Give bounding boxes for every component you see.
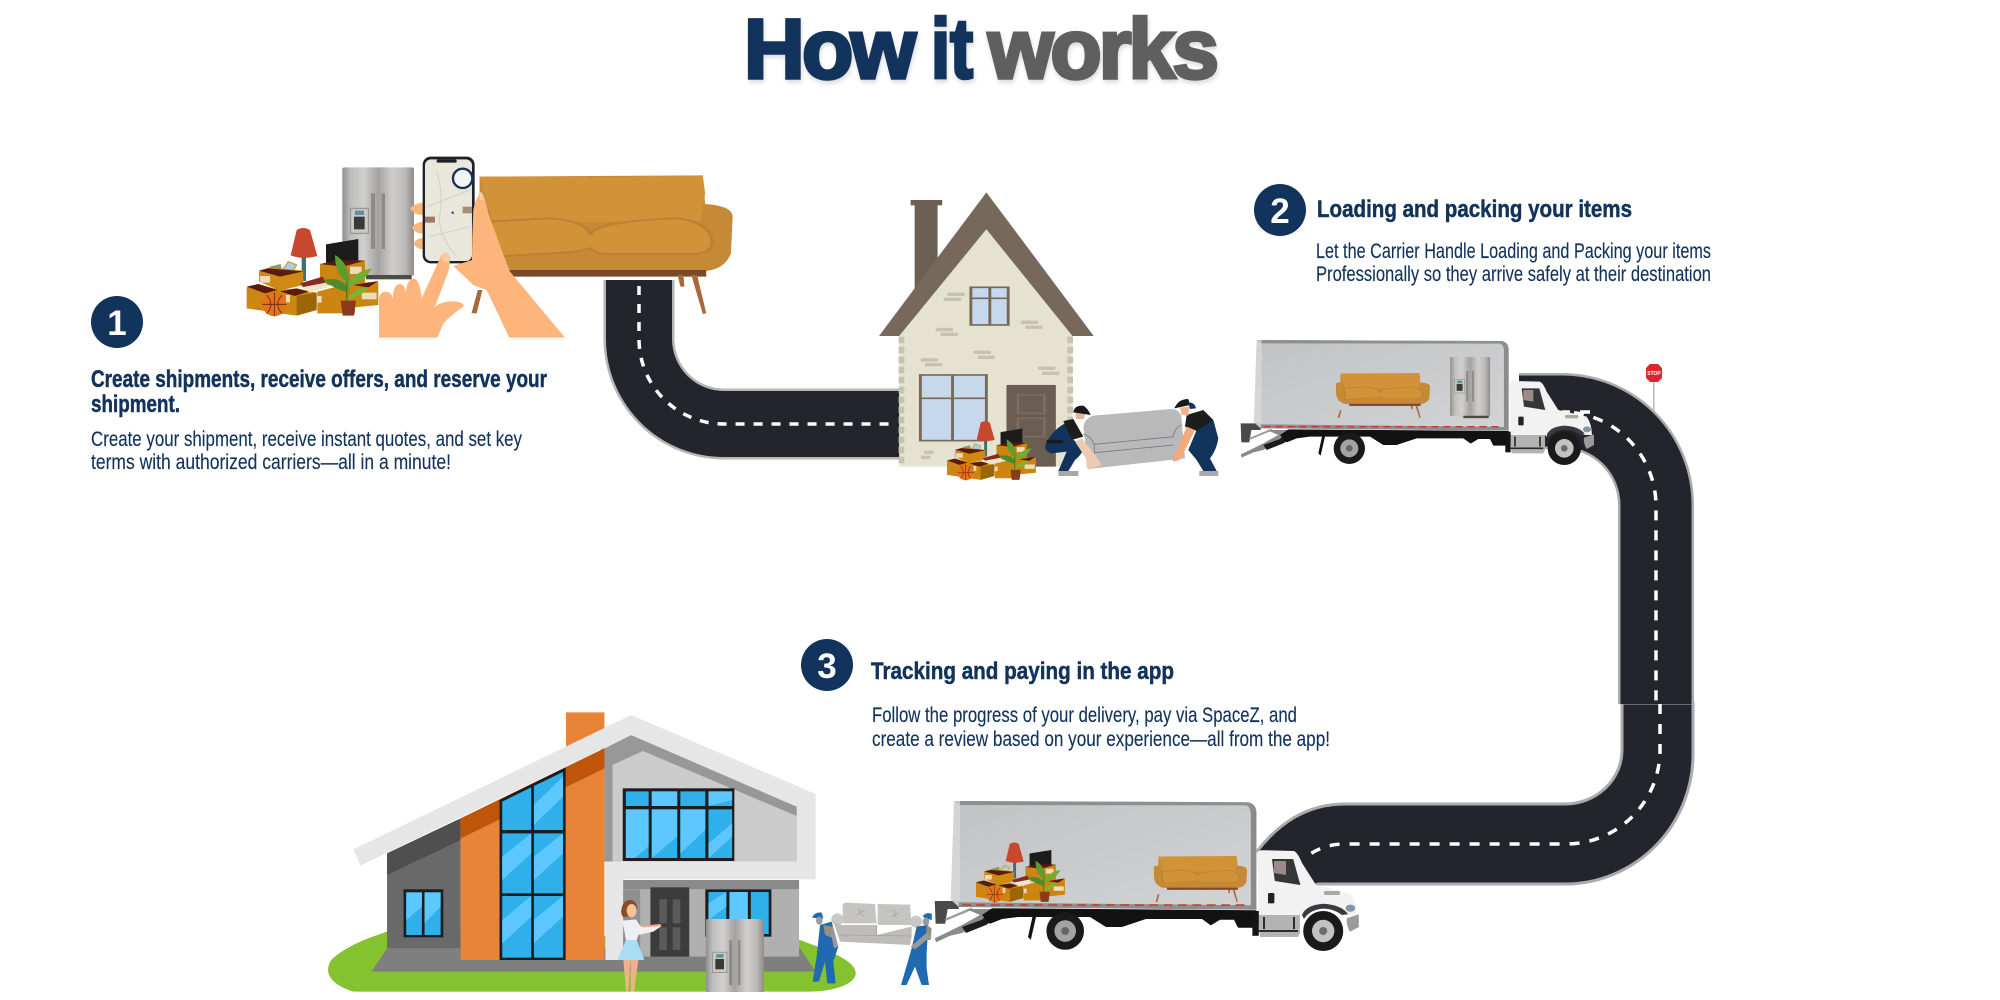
step 2 description: Let the Carrier Handle Loading and Packing your items bbox=[1316, 239, 1711, 263]
step 3 number badge bbox=[801, 639, 853, 691]
boxes in front of beige house bbox=[947, 421, 1036, 480]
fridge in front of house bbox=[706, 919, 764, 1000]
road 1: from sofa to house bbox=[639, 280, 900, 424]
step 1 description bbox=[91, 427, 522, 474]
step 3 description bbox=[872, 703, 1330, 751]
step 1 heading bbox=[91, 366, 547, 418]
step 1 heading: shipment. bbox=[91, 391, 180, 418]
step 2 number badge bbox=[1254, 184, 1306, 236]
movers carrying grey sofa bbox=[1045, 399, 1218, 476]
step 1 heading: Create shipments, receive offers, and reserve your bbox=[91, 366, 547, 393]
boxes on truck bbox=[976, 842, 1065, 902]
step 1 number badge: 1 bbox=[107, 304, 127, 343]
step 3 number badge: 3 bbox=[817, 647, 837, 686]
icon: hands holding phone bbox=[379, 157, 565, 338]
woman and movers in front of house bbox=[617, 900, 932, 992]
left mover bbox=[1045, 406, 1102, 476]
illustration: modern destination house bbox=[328, 712, 856, 992]
step 2 heading: Loading and packing your items bbox=[1317, 196, 1632, 223]
step 3 heading: Tracking and paying in the app bbox=[871, 658, 1174, 685]
truck 2 with boxes and sofa bbox=[935, 801, 1359, 951]
step 1 description: terms with authorized carriers—all in a minute! bbox=[91, 450, 451, 474]
tall window bbox=[500, 767, 566, 960]
step 3 description: create a review based on your experience—all from the app! bbox=[872, 727, 1330, 751]
title bbox=[744, 2, 1219, 96]
illustration: beige pickup house bbox=[879, 192, 1094, 467]
step 2 number badge: 2 bbox=[1270, 192, 1290, 231]
step 1 description: Create your shipment, receive instant quotes, and set key bbox=[91, 427, 522, 451]
step 2 description bbox=[1316, 239, 1711, 286]
icon: moving boxes bbox=[247, 228, 378, 316]
right mover bbox=[1173, 399, 1218, 476]
step 1 number badge bbox=[91, 296, 143, 348]
icon: stop sign bbox=[1646, 364, 1662, 410]
illustration: fridge, boxes and phone in hands bbox=[247, 157, 565, 338]
front door bbox=[650, 887, 689, 957]
icon: orange sofa bbox=[467, 175, 733, 314]
infographic canvas bbox=[91, 14, 1710, 992]
road 2: from truck around to second truck bbox=[1258, 411, 1693, 900]
woman bbox=[617, 900, 662, 992]
sofa on truck bbox=[1154, 856, 1247, 902]
left mover bbox=[812, 913, 838, 983]
icon: fridge bbox=[342, 167, 414, 279]
title: works bbox=[987, 2, 1219, 96]
icon: stop sign: STOP bbox=[1647, 371, 1661, 377]
truck 1 with sofa and fridge bbox=[1241, 340, 1594, 465]
step 3 description: Follow the progress of your delivery, pay via SpaceZ, and bbox=[872, 703, 1297, 727]
title: it bbox=[931, 2, 973, 96]
grey sofa bbox=[1083, 409, 1185, 469]
upper right window bbox=[623, 788, 734, 861]
sofa carried by movers bbox=[831, 903, 922, 945]
title: How bbox=[744, 2, 917, 96]
right mover bbox=[901, 913, 932, 985]
left window bbox=[404, 889, 443, 937]
sofa on truck bbox=[1336, 373, 1430, 418]
lower right window bbox=[705, 889, 771, 937]
fridge on truck bbox=[1450, 357, 1490, 418]
step 2 description: Professionally so they arrive safely at their destination bbox=[1316, 262, 1711, 286]
